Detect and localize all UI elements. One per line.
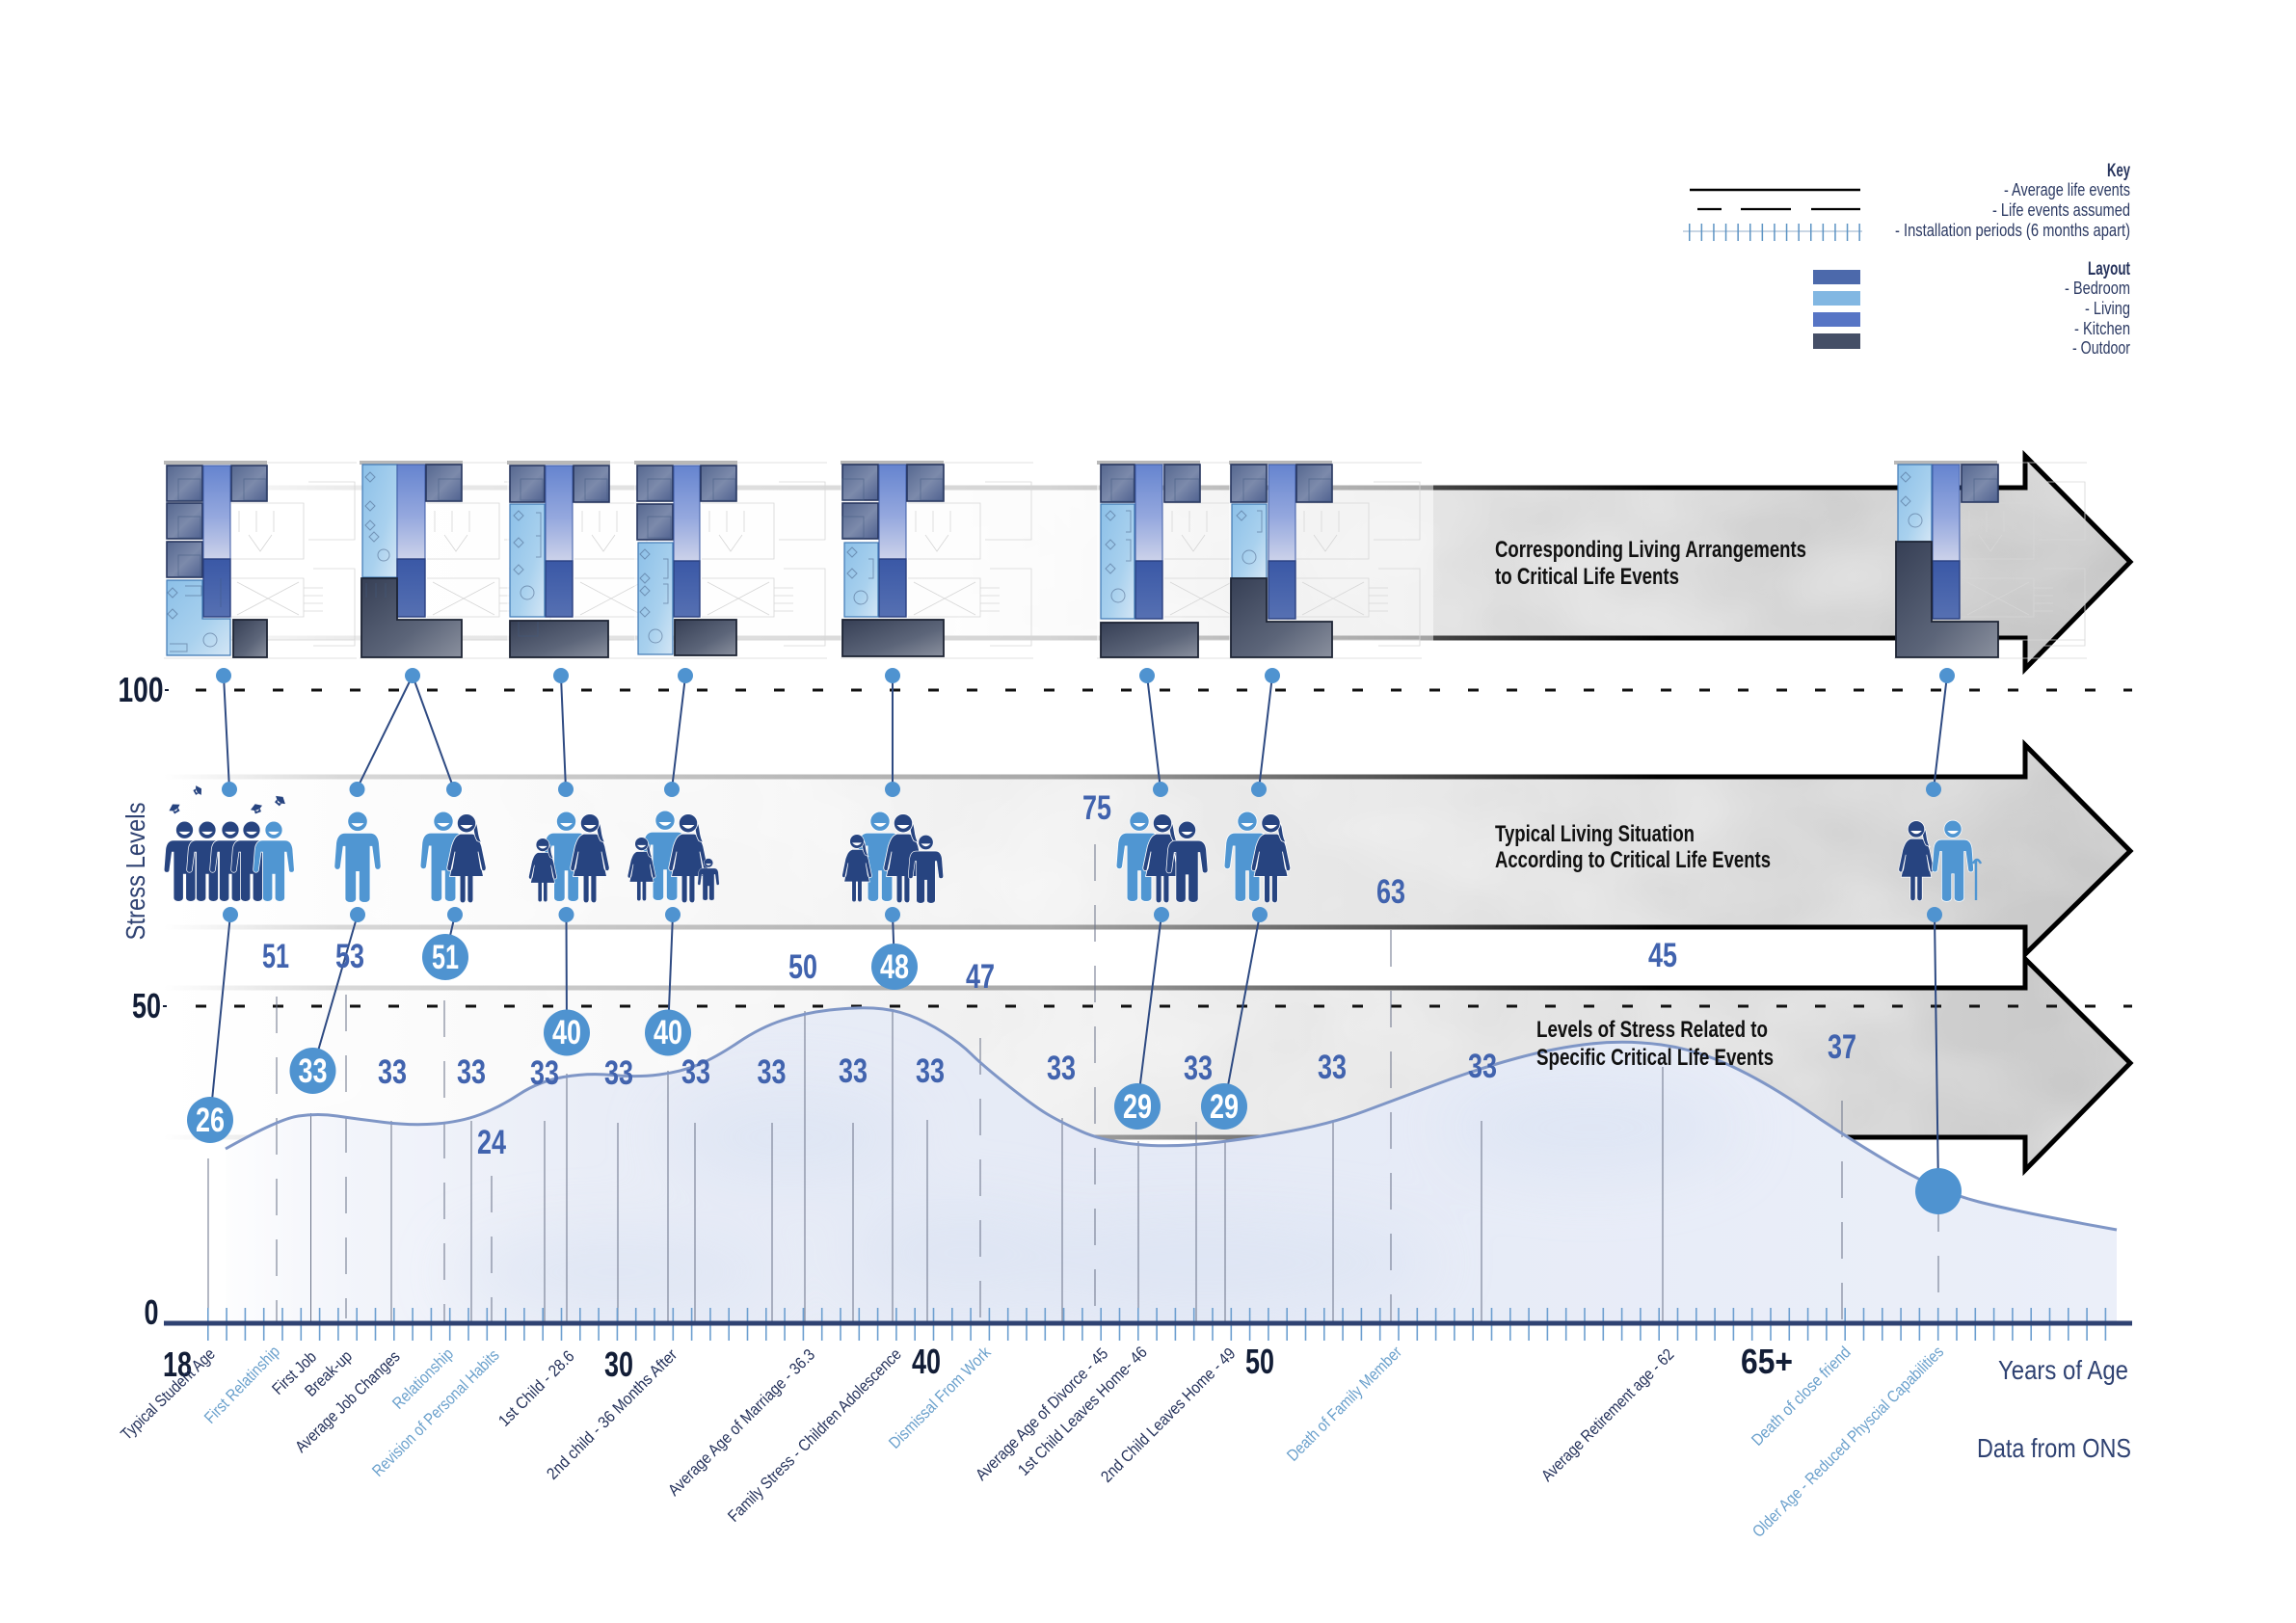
life event labels along axis: Break-up (302, 1347, 356, 1400)
stress curve line (226, 1008, 2117, 1230)
stress value badge: 48 (871, 944, 918, 990)
dashed gridline: stress 100 (196, 688, 2132, 692)
icon: couple with one child at home (1116, 812, 1208, 903)
life event labels along axis: 1st Child Leaves Home- 46 (1014, 1343, 1151, 1479)
stress value badge: 40 first child (544, 1010, 590, 1056)
life event labels along axis: Typical Student Age (118, 1344, 219, 1444)
stress value badge: 40 first child: 40 (552, 1014, 581, 1051)
floor plan 6 (1097, 461, 1290, 658)
floor plan 7 (1229, 461, 1433, 658)
legend: key heading: Key (2107, 161, 2130, 181)
legend: layout swatches (1813, 270, 1860, 349)
dashed gridline: stress 50 (196, 1004, 2132, 1008)
marker: older age point on curve (1915, 1168, 1962, 1214)
stress value badge: 26 (187, 1097, 233, 1143)
heading: levels of stress: Specific Critical Life Events (1536, 1045, 1774, 1071)
life event labels along axis: Older Age - Reduced Physcial Capabilities (1749, 1343, 1947, 1541)
life event labels along axis: Dismissal From Work (885, 1343, 995, 1452)
heading: corresponding living arrangements: Corresponding Living Arrangements (1495, 537, 1806, 563)
stress value badge: 33 (289, 1048, 335, 1094)
event lines: average life events (208, 1010, 1663, 1323)
stress values: plain numbers: 33 (457, 1053, 486, 1091)
stress values: plain numbers: 33 (681, 1053, 710, 1091)
heading: typical living situation: According to Critical Life Events (1495, 847, 1771, 873)
stress value badge: 51 (422, 934, 468, 980)
x axis age labels: 40 (912, 1342, 941, 1381)
connector lines: people to stress events (210, 915, 1938, 1191)
panel: legend key (1683, 161, 2130, 358)
floor plan 1 (164, 461, 360, 658)
icon: single person (334, 812, 381, 902)
life event labels along axis: First Relatinship (200, 1343, 283, 1427)
x axis title: Years of Age (1998, 1355, 2128, 1385)
stress value badge: 33: 33 (299, 1052, 328, 1090)
legend: layout items (2065, 279, 2130, 358)
legend: key items (1895, 180, 2130, 240)
legend: life events assumed dashes (1697, 208, 1860, 210)
life event labels along axis: Average Age of Marriage - 36.3 (664, 1345, 818, 1500)
floor plan 4 (634, 461, 842, 658)
x axis age labels: 18 (163, 1344, 192, 1384)
x axis age labels (163, 1342, 1793, 1384)
y axis labels: 100 (118, 670, 164, 709)
event lines: life events assumed (277, 844, 1938, 1323)
legend: key items: - Average life events (2004, 180, 2130, 200)
stress values: plain numbers: 33 (839, 1052, 868, 1090)
stress value badge: 51: 51 (432, 939, 459, 976)
floor plan 5 (841, 461, 1099, 658)
stress values: plain numbers: 75 (1082, 789, 1111, 827)
x axis age labels: 50 (1245, 1342, 1274, 1381)
legend: layout items: - Living (2085, 299, 2130, 318)
heading: levels of stress: Levels of Stress Related to (1536, 1017, 1768, 1043)
axis ticks: installation periods (207, 1308, 2121, 1341)
heading: levels of stress (1536, 1017, 1774, 1071)
legend: installation periods ticks (1683, 231, 1862, 232)
legend: layout heading: Layout (2088, 259, 2130, 279)
life event labels along axis: 2nd Child Leaves Home - 49 (1097, 1344, 1239, 1486)
icon: couple, children left (1224, 812, 1291, 903)
stress values: plain numbers: 33 (378, 1053, 407, 1091)
floor plan 2 (360, 461, 552, 658)
stress values: plain numbers: 51 (262, 938, 289, 975)
stress value badge: 29 second (1201, 1083, 1247, 1130)
icon: couple (420, 812, 486, 903)
axis line: years of age (164, 1320, 2132, 1326)
stress values: plain numbers: 33 (1184, 1050, 1213, 1087)
life event labels along axis: Average Age of Divorce - 45 (972, 1344, 1111, 1484)
y axis labels (118, 670, 169, 1332)
legend: key items: - Installation periods (6 months apart) (1895, 221, 2130, 240)
connector dots: below people (223, 907, 1942, 922)
life event labels along axis: 1st Child - 28.6 (494, 1347, 578, 1430)
stress values: plain numbers: 33 (1318, 1049, 1347, 1086)
stress values: plain numbers: 33 (1468, 1048, 1497, 1085)
stress values: plain numbers: 33 (916, 1052, 945, 1090)
arrow: corresponding living arrangements (164, 456, 2130, 669)
arrow: levels of stress (164, 959, 2130, 1170)
stress values: plain numbers: 24 (477, 1124, 506, 1161)
x axis age labels: 30 (604, 1344, 633, 1384)
stress values: plain numbers: 47 (966, 958, 995, 996)
y axis title: Stress Levels (120, 802, 150, 941)
stress values: plain numbers: 33 (1047, 1050, 1076, 1087)
life event labels along axis: Revision of Personal Habits (368, 1346, 503, 1480)
life event labels along axis: Relationship (388, 1344, 457, 1413)
life event labels along axis: Death of Family Member (1283, 1343, 1405, 1465)
life event labels along axis: First Job (269, 1347, 320, 1398)
stress values: plain numbers: 63 (1376, 873, 1405, 911)
floor plan 3 (507, 461, 700, 658)
stress value badge: 29 second: 29 (1210, 1088, 1239, 1126)
heading: typical living situation: Typical Living Situation (1495, 821, 1695, 847)
stress chart: area under curve (226, 1008, 2117, 1323)
life event labels along axis: Family Stress - Children Adolescence (724, 1344, 905, 1526)
connector dots: top row (216, 668, 1955, 683)
connector lines: floor plans to people (224, 676, 1947, 789)
stress value badge: 29 first (1114, 1083, 1161, 1130)
icon: family with two children (627, 811, 719, 903)
icon: students with graduation caps (164, 784, 294, 901)
life event labels along axis: 2nd child - 36 Months After (543, 1345, 681, 1483)
stress values: plain numbers: 33 (530, 1054, 559, 1092)
life event labels along axis (118, 1343, 1947, 1541)
icon: family with one child (528, 812, 609, 903)
arrow: typical living situation (164, 745, 2130, 954)
stress values: plain numbers: 53 (335, 938, 364, 975)
stress value badge: 48: 48 (880, 948, 909, 986)
stress values: plain numbers: 33 (604, 1054, 633, 1092)
legend: layout items: - Bedroom (2065, 279, 2130, 298)
y axis labels: 50 (132, 986, 161, 1025)
icon: elderly couple with cane (1899, 820, 1981, 901)
stress values: plain numbers: 37 (1828, 1028, 1856, 1066)
stress values: plain numbers: 50 (788, 948, 817, 986)
stress value badge: 29 first: 29 (1123, 1088, 1152, 1126)
stress values: plain numbers: 33 (758, 1053, 787, 1091)
heading: corresponding living arrangements: to Critical Life Events (1495, 564, 1679, 590)
connector dots: above people (222, 782, 1941, 797)
life event labels along axis: Average Job Changes (292, 1347, 404, 1456)
heading: typical living situation (1495, 821, 1771, 873)
data source note: Data from ONS (1977, 1433, 2131, 1463)
heading: corresponding living arrangements (1495, 537, 1806, 590)
life event labels along axis: Average Retirement age - 62 (1537, 1345, 1677, 1485)
stress value badge: 40 second child: 40 (654, 1014, 682, 1051)
y axis labels: 0 (145, 1292, 158, 1332)
x axis age labels: 65+ (1741, 1342, 1793, 1381)
stress values: plain numbers (262, 789, 1856, 1161)
floor plan 8 (1894, 461, 2087, 658)
legend: key items: - Life events assumed (1992, 200, 2130, 220)
legend: layout items: - Outdoor (2072, 338, 2130, 358)
life event labels along axis: Death of close friend (1748, 1344, 1855, 1450)
stress value badge: 26: 26 (196, 1102, 225, 1139)
stress value badge: 40 second child (645, 1010, 691, 1056)
icon: family with adolescent children (842, 812, 944, 903)
stress values: plain numbers: 45 (1648, 937, 1677, 974)
legend: average life events line (1690, 189, 1860, 191)
legend: layout items: - Kitchen (2074, 319, 2130, 338)
